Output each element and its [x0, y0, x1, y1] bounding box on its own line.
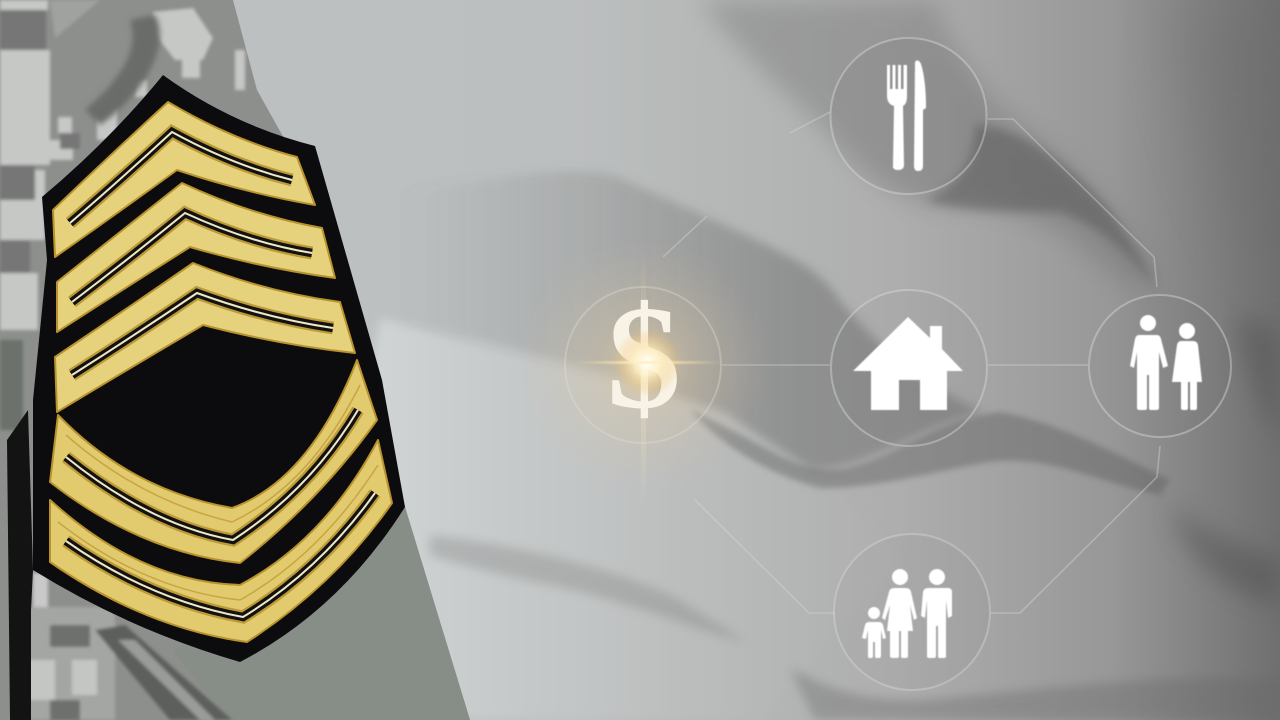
icon: man and woman — [1130, 315, 1202, 410]
icon: fork and knife — [887, 60, 926, 171]
patch backing — [33, 75, 405, 662]
node: food — [830, 38, 986, 194]
node circle — [565, 287, 721, 443]
node: couple — [1089, 295, 1231, 437]
icon: house — [853, 317, 963, 410]
icon: family of three — [862, 569, 952, 658]
rank patch: master sergeant insignia — [33, 75, 405, 662]
glow: flare core — [613, 329, 681, 397]
chevron 3 — [55, 263, 355, 412]
glow: warm halo — [520, 239, 770, 489]
rocker 1 — [50, 360, 377, 563]
rocker 2 — [50, 440, 392, 642]
node circle — [830, 38, 986, 194]
node: money — [520, 239, 770, 505]
node: housing — [831, 290, 987, 446]
node circle — [834, 534, 990, 690]
background: waving flag shadows — [360, 0, 1280, 720]
node circle — [831, 290, 987, 446]
node: family — [834, 534, 990, 690]
chevron 2 — [57, 183, 335, 332]
chevron 1 — [53, 102, 315, 257]
connector lines between icons — [663, 112, 1160, 613]
glow: vertical ray — [641, 255, 646, 505]
glow: flare streak — [572, 361, 722, 364]
node circle — [1089, 295, 1231, 437]
sleeve: camouflage uniform — [0, 0, 470, 720]
icon: dollar sign: $ — [607, 276, 681, 440]
